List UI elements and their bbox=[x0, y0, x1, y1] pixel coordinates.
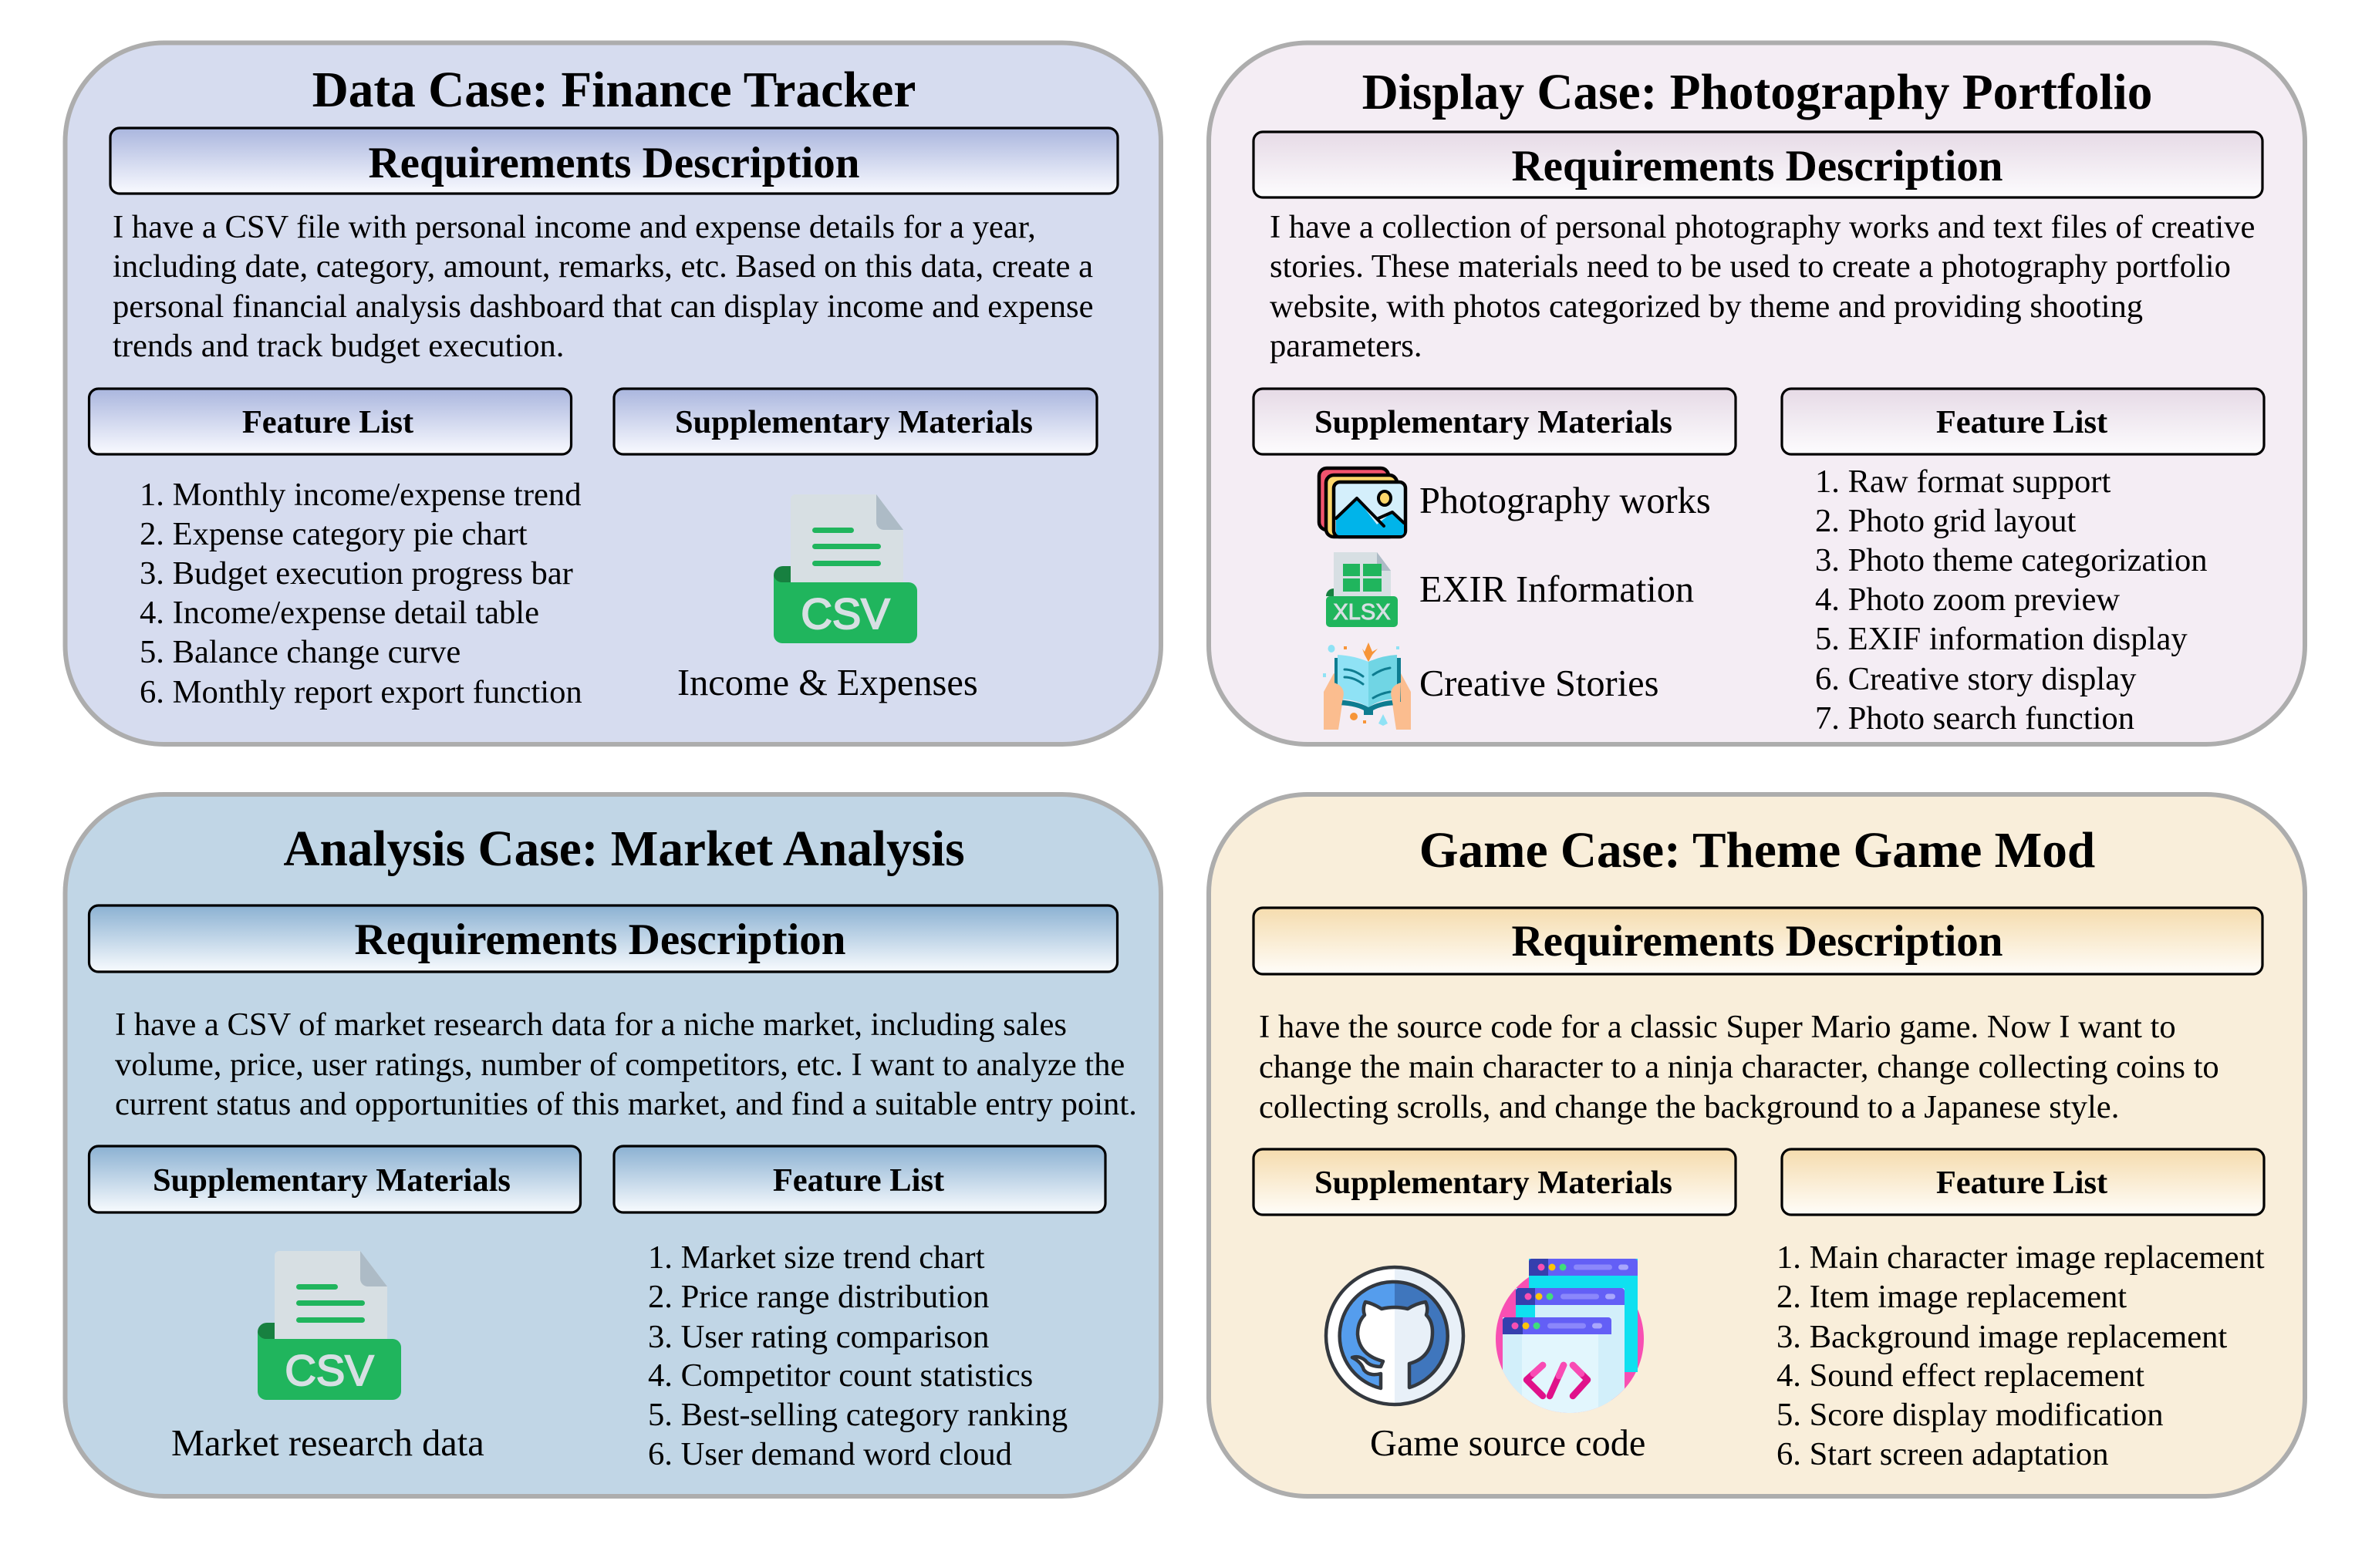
header: Feature List bbox=[614, 1146, 1105, 1212]
list: features: 4. Photo zoom preview bbox=[1815, 582, 2120, 618]
text: requirements description: parameters. bbox=[1270, 328, 1422, 364]
panel: Game Case bbox=[1209, 794, 2305, 1496]
list: features: 2. Photo grid layout bbox=[1815, 503, 2077, 539]
list: features: 5. Score display modification bbox=[1776, 1397, 2164, 1433]
text: requirements description bbox=[115, 1007, 1137, 1122]
text: requirements description: current status and opportunities of this market, and find a suitable entry point. bbox=[115, 1086, 1137, 1122]
text: requirements description: I have a CSV file with personal income and expense details for a year, bbox=[113, 209, 1036, 245]
header: Feature List: Feature List bbox=[242, 404, 413, 440]
caption: Market research data: Market research data bbox=[171, 1423, 484, 1464]
header: Feature List: Feature List bbox=[1936, 404, 2107, 440]
list: features: 3. Budget execution progress bar bbox=[140, 555, 573, 592]
panel: Data Case bbox=[65, 43, 1161, 744]
header: Feature List bbox=[89, 389, 571, 454]
icon: GitHub logo bbox=[1326, 1267, 1463, 1404]
text: requirements description: collecting scrolls, and change the background to a Japanese style. bbox=[1259, 1089, 2119, 1125]
list: features: 6. User demand word cloud bbox=[648, 1436, 1012, 1472]
header: Feature List bbox=[1782, 389, 2264, 454]
header: Requirements Description: Requirements Description bbox=[369, 139, 859, 187]
header: Supplementary Materials: Supplementary Materials bbox=[1314, 1165, 1672, 1201]
text: requirements description bbox=[113, 209, 1093, 364]
caption: EXIR Information: EXIR Information bbox=[1419, 569, 1694, 610]
list: features bbox=[140, 477, 582, 710]
icon: open book with hands bbox=[1323, 642, 1411, 730]
icon: CSV file bbox=[774, 494, 917, 643]
header: Supplementary Materials: Supplementary Materials bbox=[153, 1162, 511, 1199]
text: requirements description: website, with photos categorized by theme and providing shooting bbox=[1270, 288, 2143, 325]
header: Supplementary Materials bbox=[1253, 389, 1736, 454]
header: Supplementary Materials: Supplementary Materials bbox=[675, 404, 1033, 440]
text: requirements description: I have the source code for a classic Super Mario game. Now I want to bbox=[1259, 1009, 2176, 1045]
text: requirements description: including date, category, amount, remarks, etc. Based on this data, create a bbox=[113, 248, 1093, 285]
list: features: 5. Best-selling category ranking bbox=[648, 1397, 1068, 1433]
icon: CSV file: CSV bbox=[801, 589, 890, 638]
text: requirements description bbox=[1259, 1009, 2219, 1125]
list: features: 1. Monthly income/expense trend bbox=[140, 477, 582, 513]
text: requirements description: personal financial analysis dashboard that can display income and expense bbox=[113, 288, 1093, 325]
header: Feature List: Feature List bbox=[773, 1162, 944, 1199]
list: features bbox=[1815, 464, 2208, 737]
list: features: 7. Photo search function bbox=[1815, 700, 2134, 737]
icon: XLSX file bbox=[1326, 552, 1398, 627]
list: features: 2. Price range distribution bbox=[648, 1279, 989, 1315]
header: Supplementary Materials bbox=[614, 389, 1097, 454]
list: features: 1. Raw format support bbox=[1815, 464, 2111, 500]
icon: CSV file: CSV bbox=[285, 1346, 374, 1394]
title: Game Case: Game Case: Theme Game Mod bbox=[1419, 823, 2095, 878]
text: requirements description: volume, price, user ratings, number of competitors, etc. I want to analyze the bbox=[115, 1047, 1125, 1083]
panel: Display Case bbox=[1209, 43, 2305, 744]
icon: code windows bbox=[1496, 1259, 1644, 1419]
text: requirements description bbox=[1270, 209, 2255, 364]
header: Feature List: Feature List bbox=[1936, 1165, 2107, 1201]
list: features: 3. User rating comparison bbox=[648, 1319, 989, 1355]
list: features: 3. Background image replacement bbox=[1776, 1319, 2227, 1355]
list: features: 1. Market size trend chart bbox=[648, 1239, 985, 1276]
header: Supplementary Materials: Supplementary Materials bbox=[1314, 404, 1672, 440]
caption: Game source code: Game source code bbox=[1370, 1423, 1645, 1464]
header: Supplementary Materials bbox=[89, 1146, 580, 1212]
list: features bbox=[1776, 1239, 2265, 1472]
list: features: 4. Sound effect replacement bbox=[1776, 1357, 2144, 1394]
title: Data Case: Data Case: Finance Tracker bbox=[312, 62, 916, 118]
list: features: 6. Creative story display bbox=[1815, 661, 2137, 697]
header: Feature List bbox=[1782, 1149, 2264, 1215]
panel: Analysis Case bbox=[65, 794, 1161, 1496]
text: requirements description: I have a CSV of market research data for a niche market, including sales bbox=[115, 1007, 1067, 1043]
caption: Income & Expenses: Income & Expenses bbox=[677, 663, 978, 703]
icon: XLSX file: XLSX bbox=[1333, 600, 1391, 625]
list: features: 3. Photo theme categorization bbox=[1815, 542, 2208, 578]
list: features: 1. Main character image replacement bbox=[1776, 1239, 2265, 1276]
header: Supplementary Materials bbox=[1253, 1149, 1736, 1215]
caption: Creative Stories: Creative Stories bbox=[1419, 663, 1658, 704]
icon: photo stack bbox=[1319, 468, 1405, 537]
header: Requirements Description bbox=[1253, 132, 2262, 197]
list: features: 4. Competitor count statistics bbox=[648, 1357, 1033, 1394]
caption: Photography works: Photography works bbox=[1419, 481, 1711, 521]
header: Requirements Description: Requirements Description bbox=[1512, 142, 2003, 191]
list: features: 2. Item image replacement bbox=[1776, 1279, 2127, 1315]
list: features: 5. Balance change curve bbox=[140, 634, 461, 670]
header: Requirements Description bbox=[1253, 908, 2262, 974]
header: Requirements Description: Requirements Description bbox=[1512, 917, 2003, 966]
list: features: 2. Expense category pie chart bbox=[140, 516, 528, 552]
list: features: 6. Start screen adaptation bbox=[1776, 1436, 2109, 1472]
list: features: 4. Income/expense detail table bbox=[140, 595, 539, 631]
text: requirements description: trends and track budget execution. bbox=[113, 328, 564, 364]
header: Requirements Description: Requirements Description bbox=[355, 916, 845, 964]
header: Requirements Description bbox=[110, 128, 1118, 194]
title: Display Case: Display Case: Photography Portfolio bbox=[1362, 65, 2152, 120]
text: requirements description: change the main character to a ninja character, change collecting coins to bbox=[1259, 1049, 2219, 1085]
icon: CSV file bbox=[258, 1251, 401, 1400]
title: Analysis Case: Analysis Case: Market Analysis bbox=[283, 821, 965, 877]
list: features: 6. Monthly report export function bbox=[140, 674, 582, 710]
text: requirements description: stories. These materials need to be used to create a photography portfolio bbox=[1270, 248, 2231, 285]
list: features bbox=[648, 1239, 1068, 1472]
list: features: 5. EXIF information display bbox=[1815, 621, 2188, 657]
header: Requirements Description bbox=[89, 905, 1117, 972]
text: requirements description: I have a collection of personal photography works and text files of creative bbox=[1270, 209, 2255, 245]
